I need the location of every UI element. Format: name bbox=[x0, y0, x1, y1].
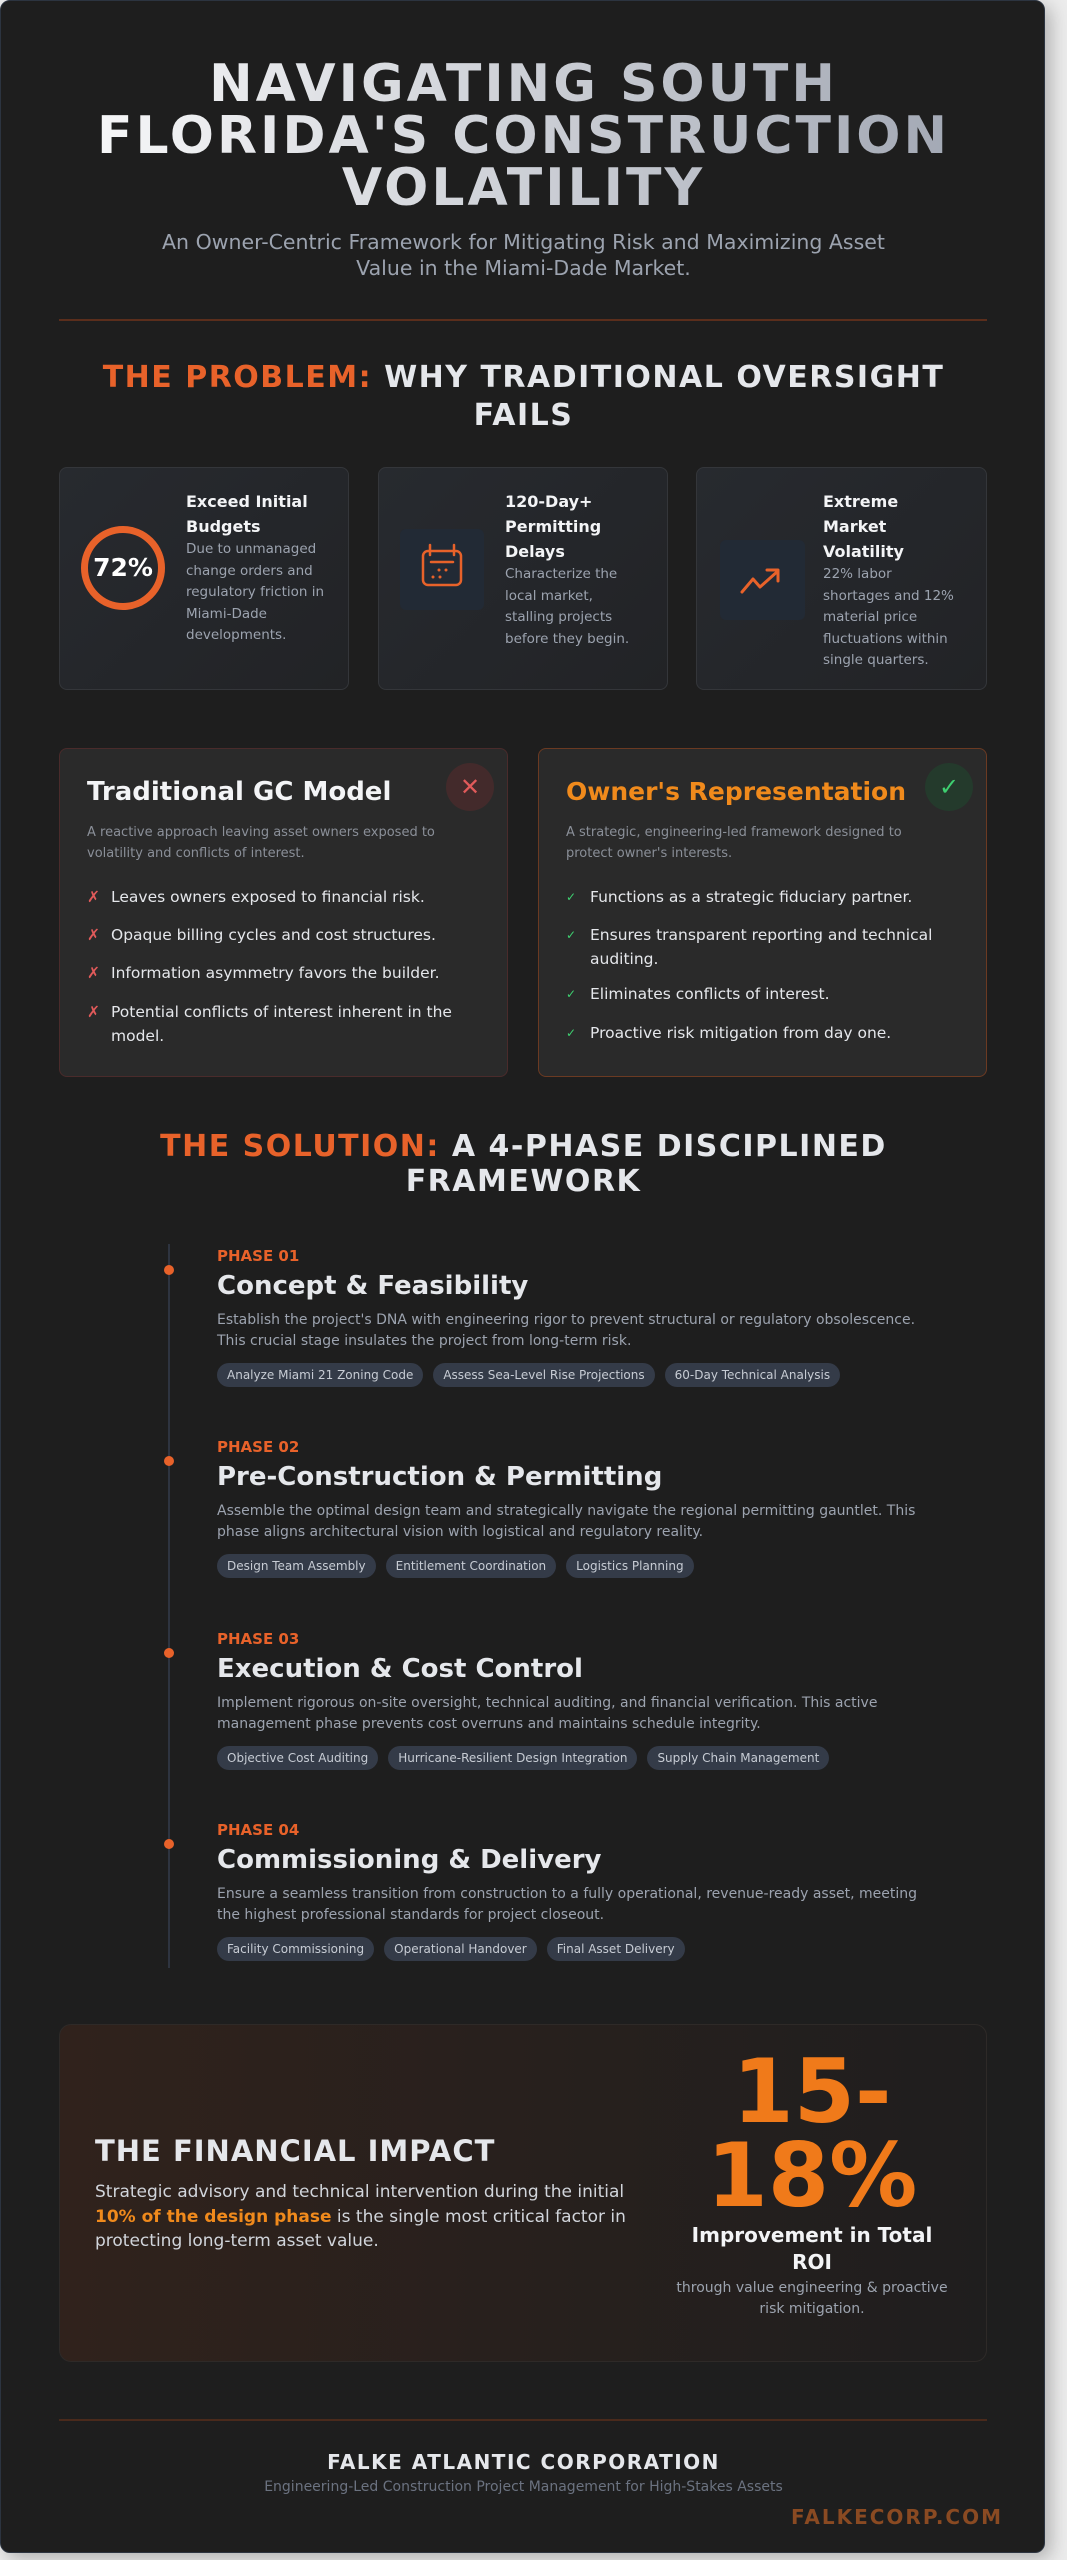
list: owner's rep benefits: ✓ bbox=[566, 1026, 576, 1040]
list: traditional drawbacks: Information asymmetry favors the builder. bbox=[111, 964, 440, 982]
icon: 72% ring: 72% bbox=[93, 553, 153, 582]
phase 03: Execution & Cost Control bbox=[217, 1654, 583, 1684]
list: traditional drawbacks: ✗ bbox=[87, 926, 100, 944]
phase 02: Assemble the optimal design team and strategically navigate the regional permitting gauntlet. This phase aligns architectural vision with logistical and regulatory reality. bbox=[217, 1503, 915, 1540]
phase 03: Supply Chain Management bbox=[657, 1751, 819, 1765]
phase 01 bbox=[216, 1247, 915, 1387]
phase 02: PHASE 02 bbox=[217, 1438, 299, 1456]
phase 04: PHASE 04 bbox=[217, 1821, 299, 1839]
text: permitting bbox=[505, 492, 629, 646]
icon: trending arrow bbox=[720, 540, 805, 620]
heading: financial impact: THE FINANCIAL IMPACT bbox=[95, 2134, 495, 2168]
panel: permitting card bbox=[378, 467, 668, 690]
phase 01: Analyze Miami 21 Zoning Code bbox=[227, 1368, 413, 1382]
heading: traditional: Traditional GC Model bbox=[87, 777, 391, 807]
list: traditional drawbacks: ✗ bbox=[87, 888, 100, 906]
panel: budgets card bbox=[59, 467, 349, 690]
list: owner's rep benefits: ✓ bbox=[566, 890, 576, 904]
phase 01: Establish the project's DNA with engineering rigor to prevent structural or regulatory obsolescence. This crucial stage insulates the project from long-term risk. bbox=[217, 1312, 915, 1348]
list: owner's rep benefits: Ensures transparent reporting and technical auditing. bbox=[590, 926, 932, 968]
icon: check bbox=[925, 763, 973, 811]
phase 01: Concept & Feasibility bbox=[217, 1271, 528, 1301]
description: owner's rep: A strategic, engineering-led framework designed to protect owner's interests. bbox=[566, 825, 902, 861]
phase 02: Entitlement Coordination bbox=[396, 1559, 546, 1573]
footer: company: FALKE ATLANTIC CORPORATION bbox=[327, 2450, 720, 2474]
panel: volatility card bbox=[696, 467, 987, 690]
text: budgets: Due to unmanaged change orders and regulatory friction in Miami-Dade developments. bbox=[186, 541, 324, 643]
phase 04: Facility Commissioning bbox=[227, 1942, 364, 1956]
phase 03: Implement rigorous on-site oversight, technical auditing, and financial verification. This active management phase prevents cost overruns and maintains schedule integrity. bbox=[217, 1695, 877, 1732]
text: permitting: Characterize the local market, stalling projects before they begin. bbox=[505, 566, 629, 646]
stat: 15-18% ROI: 18% bbox=[707, 2124, 917, 2227]
timeline bbox=[164, 1244, 174, 1968]
text: budgets bbox=[186, 492, 324, 643]
phase 02: Pre-Construction & Permitting bbox=[217, 1462, 662, 1492]
phase 01: 60-Day Technical Analysis bbox=[675, 1368, 830, 1382]
phase 04: Final Asset Delivery bbox=[557, 1942, 675, 1956]
text: budgets: Exceed Initial Budgets bbox=[186, 492, 308, 536]
phase 01: PHASE 01 bbox=[217, 1247, 299, 1265]
list: owner's rep benefits: Eliminates conflicts of interest. bbox=[590, 985, 830, 1003]
list: owner's rep benefits: ✓ bbox=[566, 928, 576, 942]
phase 01: Assess Sea-Level Rise Projections bbox=[443, 1368, 645, 1382]
panel: traditional GC model bbox=[59, 748, 508, 1077]
text: volatility bbox=[823, 492, 954, 668]
heading: the solution: THE SOLUTION: A 4-PHASE DISCIPLINED FRAMEWORK bbox=[160, 1129, 887, 1199]
icon: x: ✕ bbox=[460, 773, 480, 801]
phase 04: Operational Handover bbox=[394, 1942, 527, 1956]
text: permitting: 120-Day+ Permitting Delays bbox=[505, 492, 601, 561]
list: owner's rep benefits: Proactive risk mitigation from day one. bbox=[590, 1024, 891, 1042]
panel: owner's representation bbox=[538, 748, 987, 1077]
text: financial impact: Strategic advisory and technical intervention during the initial 10% of the design phase is the single most critical factor in protecting long-term asset value. bbox=[95, 2182, 626, 2251]
stat: 15-18% ROI: 15- bbox=[732, 2040, 891, 2143]
list: traditional drawbacks: ✗ bbox=[87, 1003, 100, 1021]
list: traditional drawbacks: Leaves owners exposed to financial risk. bbox=[111, 888, 425, 906]
stat: 15-18% ROI bbox=[676, 2040, 948, 2317]
phase 03 bbox=[217, 1630, 877, 1770]
list: owner's rep benefits: ✓ bbox=[566, 987, 576, 1001]
footer: website: FALKECORP.COM bbox=[791, 2505, 1003, 2529]
text: volatility: 22% labor shortages and 12% material price fluctuations within single quarters. bbox=[823, 566, 954, 668]
title: FLORIDA'S CONSTRUCTION bbox=[97, 106, 950, 166]
list: owner's rep benefits bbox=[566, 888, 932, 1042]
panel: financial impact bbox=[59, 2024, 987, 2362]
title: NAVIGATING SOUTH bbox=[209, 54, 838, 114]
phase 04: Ensure a seamless transition from construction to a fully operational, revenue-ready asset, meeting the highest professional standards for project closeout. bbox=[217, 1886, 917, 1922]
text: volatility: Extreme Market Volatility bbox=[823, 492, 904, 561]
list: traditional drawbacks: Potential conflicts of interest inherent in the model. bbox=[111, 1003, 452, 1045]
phase 04: Commissioning & Delivery bbox=[217, 1845, 601, 1875]
title: VOLATILITY bbox=[342, 158, 705, 218]
list: owner's rep benefits: Functions as a strategic fiduciary partner. bbox=[590, 888, 912, 906]
description: traditional: A reactive approach leaving asset owners exposed to volatility and conflicts of interest. bbox=[87, 825, 435, 861]
phase 03: Objective Cost Auditing bbox=[227, 1751, 368, 1765]
list: traditional drawbacks: Opaque billing cycles and cost structures. bbox=[111, 926, 436, 944]
icon: calendar bbox=[400, 529, 484, 610]
phase 02: Logistics Planning bbox=[576, 1559, 684, 1573]
phase 02: Design Team Assembly bbox=[227, 1559, 366, 1573]
heading: owner's rep: Owner's Representation bbox=[566, 777, 906, 806]
phase 04 bbox=[217, 1821, 917, 1961]
icon: 72% ring bbox=[81, 526, 165, 610]
list: traditional drawbacks: ✗ bbox=[87, 964, 100, 982]
stat: 15-18% ROI: Improvement in Total ROI bbox=[692, 2223, 932, 2274]
icon: x bbox=[446, 763, 494, 811]
list: traditional drawbacks bbox=[87, 888, 452, 1045]
phase 02 bbox=[217, 1438, 915, 1578]
heading: the problem: THE PROBLEM: WHY TRADITIONAL OVERSIGHT FAILS bbox=[103, 360, 944, 433]
icon: check: ✓ bbox=[939, 773, 959, 801]
phase 03: Hurricane-Resilient Design Integration bbox=[398, 1751, 627, 1765]
title bbox=[1, 58, 1046, 214]
phase 03: PHASE 03 bbox=[217, 1630, 299, 1648]
subtitle: An Owner-Centric Framework for Mitigating Risk and Maximizing Asset Value in the Miami-Dade Market. bbox=[162, 230, 885, 280]
footer: tagline: Engineering-Led Construction Project Management for High-Stakes Assets bbox=[264, 2479, 783, 2495]
stat: 15-18% ROI: through value engineering & proactive risk mitigation. bbox=[676, 2280, 948, 2317]
